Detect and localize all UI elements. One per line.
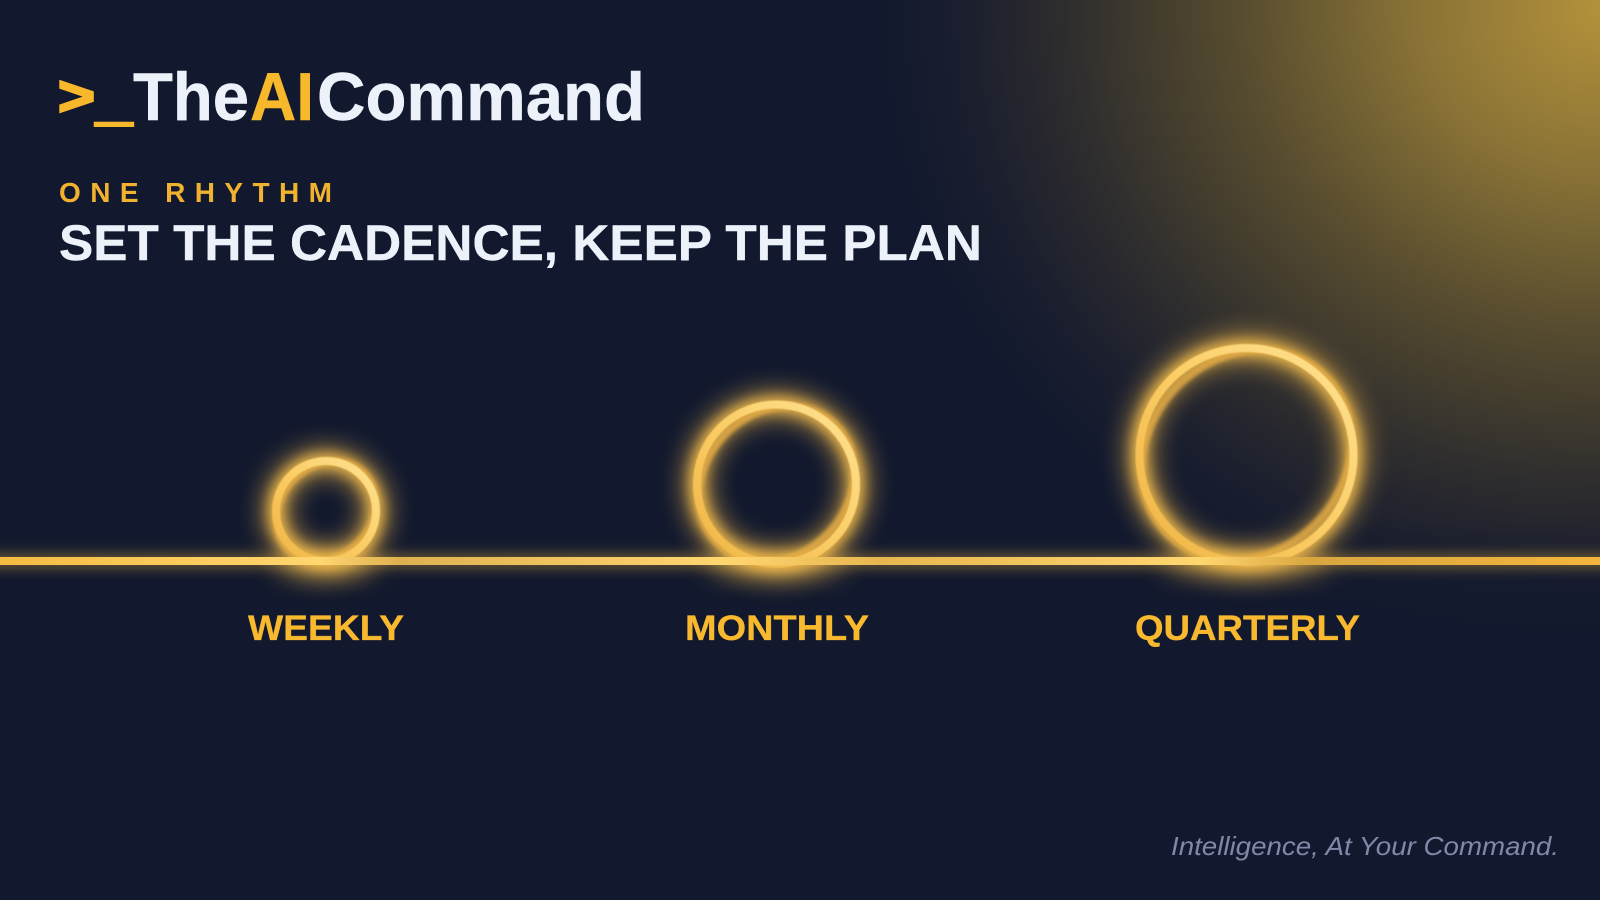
label: monthly: MONTHLY <box>685 609 869 648</box>
baseline <box>0 557 1600 565</box>
headline: SET THE CADENCE, KEEP THE PLAN <box>59 215 982 271</box>
baseline glow <box>0 556 1600 566</box>
logo underscore: _ <box>95 64 133 131</box>
logo word Command: Command <box>317 59 645 135</box>
label: weekly: WEEKLY <box>248 609 404 648</box>
tagline: Intelligence, At Your Command. <box>1171 831 1559 861</box>
quarterly loop <box>1099 307 1394 603</box>
logo <box>58 59 645 135</box>
weekly loop <box>256 441 396 581</box>
monthly loop <box>667 374 886 594</box>
logo prompt: > <box>58 64 95 127</box>
corner glow <box>800 0 1600 720</box>
corner glow floor fade <box>800 520 1600 720</box>
eyebrow: ONE RHYTHM <box>59 177 332 208</box>
logo word AI: AI <box>250 59 314 135</box>
label: quarterly: QUARTERLY <box>1135 609 1360 648</box>
logo word The: The <box>133 59 249 135</box>
